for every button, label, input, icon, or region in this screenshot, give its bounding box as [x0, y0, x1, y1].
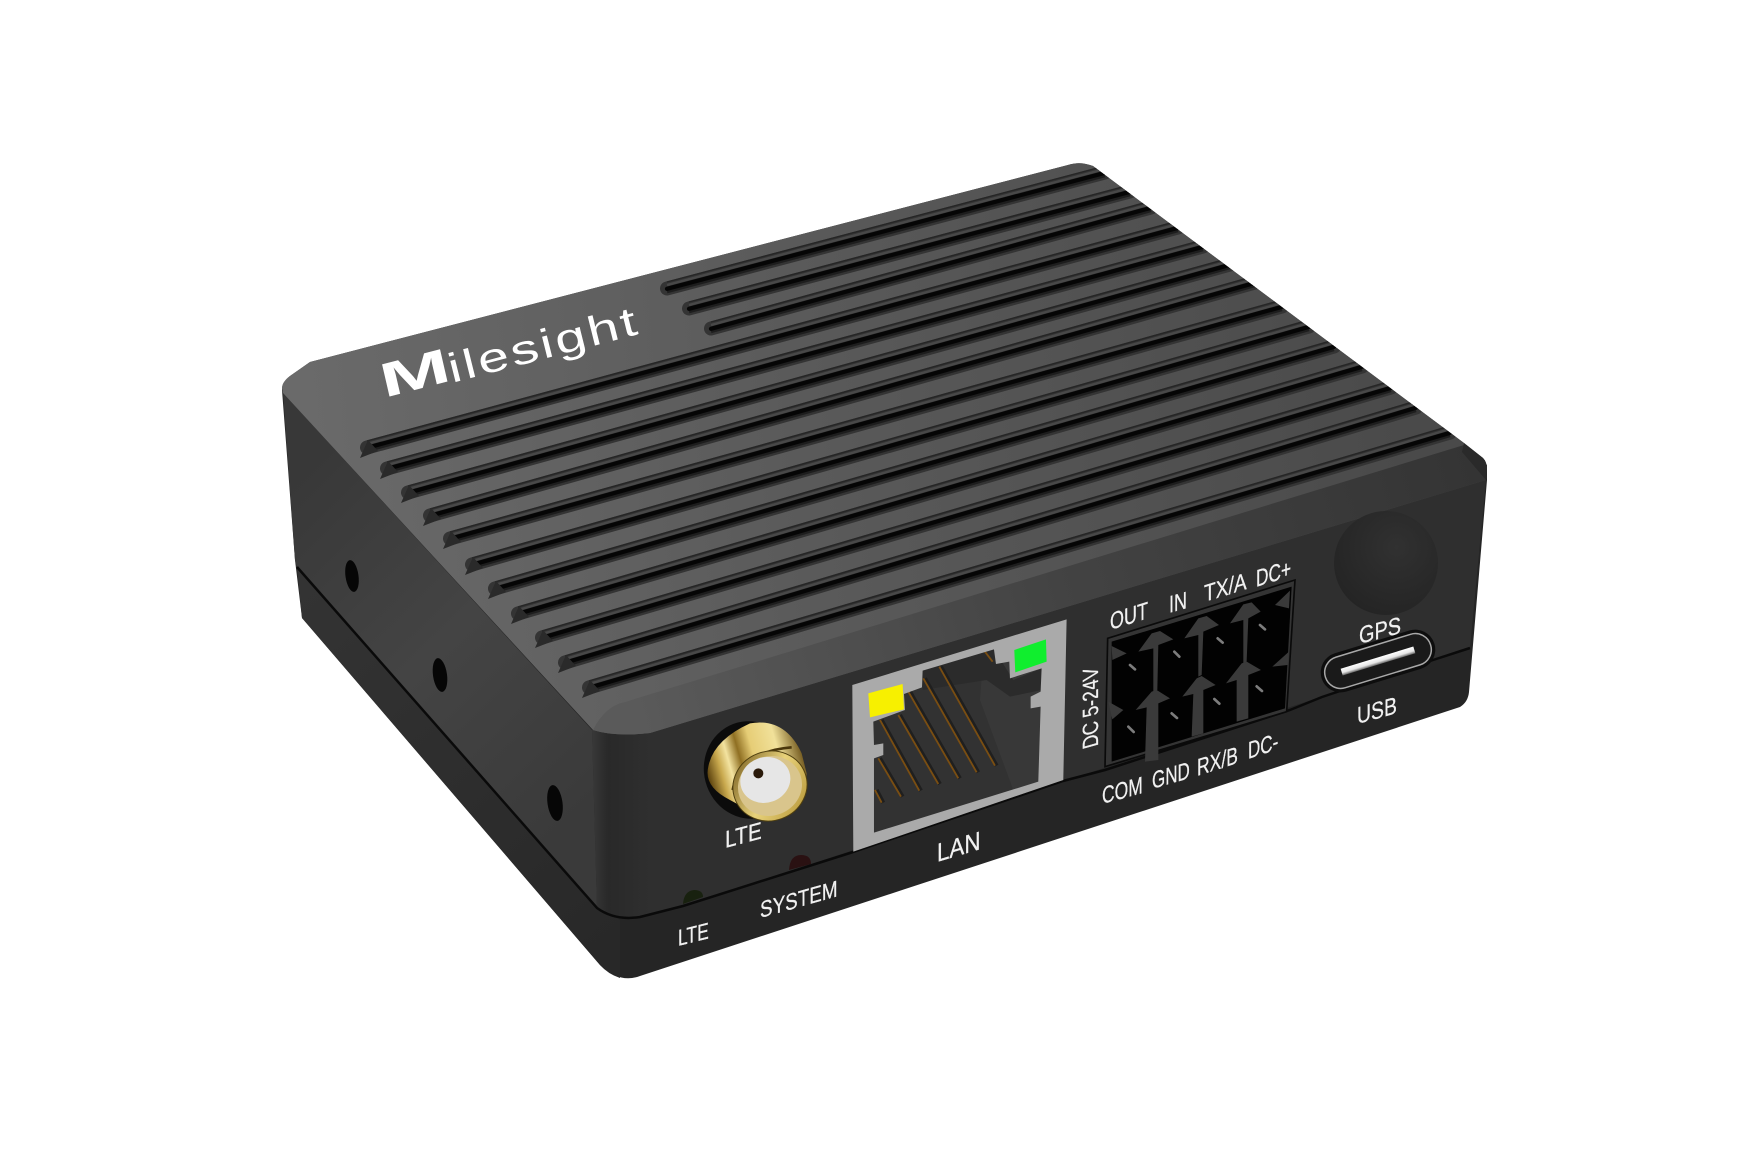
metal frame: [852, 619, 1067, 852]
heat-sink fins: [360, 166, 1450, 698]
rounded front corner: [592, 730, 650, 918]
terminal screws: [1128, 625, 1265, 732]
GPS antenna cover: [1334, 511, 1438, 615]
label: DC 5-24V: DC 5-24V: [1079, 664, 1103, 751]
label: GPS: GPS: [1359, 612, 1401, 649]
SMA antenna connector: [693, 711, 817, 831]
port shadow: [1316, 625, 1440, 697]
logo: Milesight: [374, 298, 644, 408]
label: LTE antenna: LTE: [725, 816, 762, 853]
front face: [593, 480, 1486, 918]
terminal labels bottom row: DC-: [1248, 729, 1278, 765]
contact pins: [875, 652, 995, 803]
top right corner chamfer: [1462, 443, 1487, 480]
left lower band: [297, 568, 620, 978]
front bevel: [593, 445, 1487, 734]
terminal labels top row: TX/A: [1204, 567, 1247, 607]
label: LAN: LAN: [937, 827, 980, 868]
status LED: LTE: [683, 890, 703, 904]
center pin hole: [753, 768, 763, 778]
left side face: [283, 393, 597, 908]
status LED: system: [789, 855, 811, 870]
label: SYSTEM: SYSTEM: [760, 876, 838, 923]
green LED: [1014, 639, 1047, 672]
logo: Milesight: ilesight: [443, 298, 644, 392]
terminal labels bottom row: [1102, 729, 1278, 810]
seam between body and base: [297, 567, 1470, 918]
yellow LED: [868, 684, 904, 717]
side screw holes: [343, 559, 565, 822]
block chambers: [1112, 587, 1292, 762]
block housing: [1105, 580, 1295, 767]
port tongue: [1341, 647, 1415, 675]
body silhouette and lower band: [282, 163, 1487, 978]
port shell: [1321, 630, 1435, 692]
connector shadow: [693, 711, 807, 829]
connector collar: [733, 747, 792, 790]
terminal labels top row: [1110, 555, 1291, 636]
top face: [282, 163, 1487, 734]
USB-C port: [1316, 625, 1440, 697]
terminal block: [1105, 580, 1295, 767]
label: LTE indicator: LTE: [678, 918, 709, 952]
terminal labels bottom row: GND: [1152, 758, 1190, 795]
upper inner shadow: [923, 649, 1042, 697]
device body: [282, 163, 1487, 978]
RJ45 LAN port: [852, 619, 1067, 852]
product illustration: Milesight cellular router: [282, 163, 1487, 978]
terminal labels top row: IN: [1169, 587, 1187, 619]
terminal labels top row: DC+: [1256, 555, 1291, 593]
connector ring: [723, 741, 817, 831]
separator arrows: [1108, 591, 1290, 762]
contact pin slots: [877, 667, 997, 803]
label: USB: USB: [1357, 691, 1397, 729]
terminal labels top row: OUT: [1110, 596, 1148, 636]
dielectric: [734, 750, 797, 810]
logo: Milesight: M: [374, 338, 455, 408]
terminal labels bottom row: COM: [1102, 772, 1143, 810]
right inner wall: [980, 657, 1042, 790]
terminal labels bottom row: RX/B: [1197, 742, 1238, 782]
connector body: [708, 722, 807, 820]
connector inner wall: [729, 747, 811, 825]
port interior: [852, 619, 1067, 852]
